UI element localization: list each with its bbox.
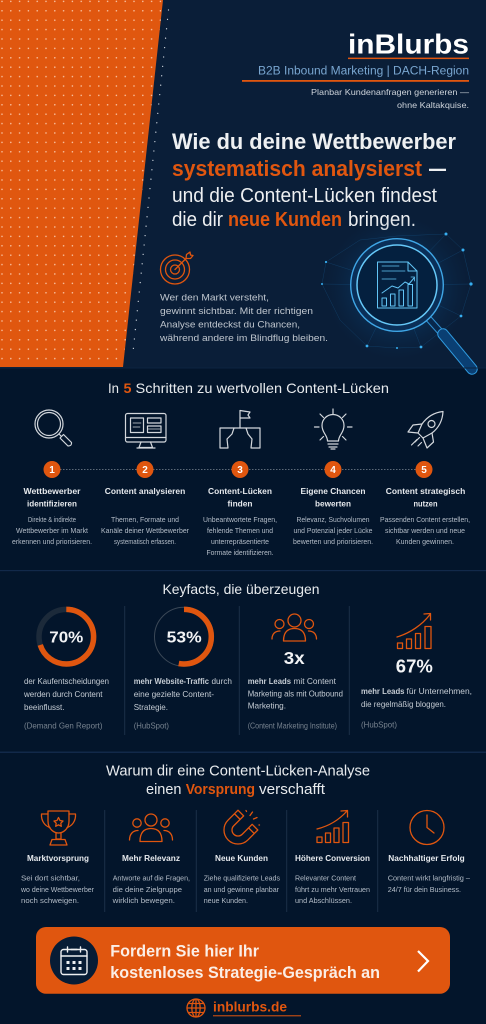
step 3 — [203, 410, 277, 557]
step 5 text — [380, 515, 470, 546]
step 1 heading: Wettbewerber — [24, 486, 81, 496]
panel: hero — [0, 0, 486, 369]
step 1 heading — [24, 486, 81, 508]
step 4 text — [293, 515, 373, 546]
donut chart: 70 percent: 70% — [49, 630, 83, 647]
fact text 70 percent — [23, 676, 109, 712]
subline: Planbar Kundenanfragen generieren — — [311, 87, 470, 97]
step 4 heading — [300, 486, 366, 508]
step 5 — [380, 412, 470, 546]
benefit 1 text: Sei dort sichtbar, — [21, 874, 80, 883]
benefit 5 text — [388, 874, 471, 894]
fact text 70 percent: werden durch Content — [23, 689, 103, 699]
main title: neue Kunden — [228, 209, 342, 231]
fact 53 percent — [134, 607, 232, 731]
subline — [311, 87, 470, 110]
fact 70 percent — [23, 609, 109, 731]
fact text 70 percent: beeinflusst. — [24, 702, 64, 712]
benefit 4 — [295, 810, 370, 905]
step 1 heading: identifizieren — [27, 498, 77, 508]
donut chart: 53 percent: 53% — [167, 630, 202, 647]
fact text 3x: mit Content — [294, 676, 337, 686]
icon: rocket — [408, 412, 443, 448]
icon: flag over gap — [220, 410, 260, 448]
main title: — — [429, 156, 446, 181]
benefit 2 — [112, 814, 190, 905]
icon: target — [160, 252, 193, 284]
heading: five steps: Schritten zu wertvollen Content-Lücken — [136, 380, 389, 396]
step 1 — [12, 410, 92, 546]
icon: light bulb — [314, 409, 352, 449]
heading: benefits: verschafft — [259, 782, 325, 798]
step 2 — [101, 414, 189, 546]
step 2 text: Kanäle deiner Wettbewerber — [101, 526, 189, 535]
fact text 3x: Marketing als mit Outbound — [248, 688, 343, 698]
step 4 heading: bewerten — [315, 498, 351, 508]
stat 67 percent: 67% — [396, 657, 433, 677]
divider hero — [0, 368, 486, 369]
badge 5: 5 — [421, 465, 427, 476]
intro text: gewinnt sichtbar. Mit der richtigen — [160, 306, 313, 316]
step 1 text: erkennen und priorisieren. — [12, 537, 92, 546]
badge 3 — [232, 461, 248, 478]
orange slanted panel — [0, 0, 168, 367]
benefit 1 text: wo deine Wettbewerber — [20, 885, 94, 894]
benefit 5 — [388, 810, 471, 894]
benefit 4 text: und Abschlüssen. — [295, 896, 352, 905]
stat 3x: 3x — [284, 648, 305, 668]
step 3 text: Unbeantwortete Fragen, — [203, 515, 277, 524]
intro text: während andere im Blindflug bleiben. — [159, 333, 328, 343]
benefit 3 text — [204, 874, 280, 905]
intro text: Wer den Markt versteht, — [160, 292, 269, 302]
benefit 3 text: neue Kunden. — [204, 896, 248, 905]
tagline: B2B Inbound Marketing | DACH-Region — [258, 65, 469, 77]
step 5 text: Kunden gewinnen. — [396, 537, 454, 546]
benefit 4 heading: Höhere Conversion — [295, 853, 370, 863]
divider benefits — [0, 752, 486, 753]
step 4 text: Relevanz, Suchvolumen — [296, 515, 370, 524]
divider keyfacts — [0, 570, 486, 571]
benefit 2 text: wirklich bewegen. — [112, 896, 175, 905]
source: (HubSpot) — [361, 720, 397, 730]
intro text — [159, 292, 328, 343]
website address: inblurbs.de — [213, 999, 287, 1015]
icon: trophy — [41, 811, 76, 845]
button text: Fordern Sie hier Ihr — [110, 943, 260, 961]
logo: inBlurbs: inBlurbs — [348, 28, 469, 60]
icon: magnet — [218, 810, 260, 850]
step 4 heading: Eigene Chancen — [300, 486, 366, 496]
benefit 1 text — [20, 874, 94, 905]
icon: growth chart — [317, 810, 348, 842]
step 2 text — [101, 515, 189, 546]
panel: five steps — [12, 380, 470, 557]
fact text 67 percent: mehr Leads — [361, 686, 405, 696]
step 3 heading — [208, 486, 272, 508]
step 3 heading: finden — [228, 498, 252, 508]
fact text 3x: Marketing. — [248, 701, 286, 711]
badge 4: 4 — [330, 465, 336, 476]
illustration: magnifier over document — [321, 216, 473, 369]
step 5 heading — [386, 486, 465, 508]
benefit 2 heading: Mehr Relevanz — [122, 853, 180, 863]
benefit 3 heading: Neue Kunden — [215, 853, 268, 863]
main title: bringen. — [348, 209, 416, 231]
fact 67 percent — [361, 614, 472, 730]
main title: Wie du deine Wettbewerber — [172, 129, 456, 154]
fact text 67 percent — [361, 686, 472, 709]
step 5 heading: nutzen — [414, 498, 438, 508]
step 1 text: Wettbewerber im Markt — [16, 526, 89, 535]
benefit 3 — [204, 810, 280, 905]
benefit 2 text: die deine Zielgruppe — [113, 885, 182, 894]
heading: benefits: Warum dir eine Content-Lücken-Analyse — [106, 764, 370, 780]
icon: clock — [410, 810, 444, 844]
fact text 53 percent: eine gezielte Content- — [134, 689, 214, 699]
benefit 3 text: Ziehe qualifizierte Leads — [204, 874, 280, 883]
step 1 text: Direkte & indirekte — [28, 515, 76, 524]
icon: people — [272, 614, 316, 641]
benefit 4 text — [295, 874, 370, 905]
step 3 text: fehlende Themen und — [207, 526, 273, 535]
step 3 heading: Content-Lücken — [208, 486, 272, 496]
panel: keyfacts — [23, 581, 472, 735]
step 2 heading: Content analysieren — [105, 486, 185, 496]
step 4 — [293, 409, 373, 546]
step 4 text: bewerten und priorisieren. — [293, 537, 373, 546]
fact text 53 percent: durch — [212, 676, 232, 686]
step 3 text: unterrepräsentierte — [211, 537, 269, 546]
fact text 70 percent: der Kaufentscheidungen — [24, 676, 109, 686]
panel: benefits — [20, 764, 471, 912]
heading: keyfacts: Keyfacts, die überzeugen — [162, 581, 320, 597]
icon: magnifier — [35, 410, 72, 446]
fact text 53 percent: Strategie. — [134, 702, 168, 712]
heading: five steps: In — [108, 380, 119, 396]
benefit 5 text: Content wirkt langfristig – — [388, 874, 471, 883]
benefit 4 text: führt zu mehr Vertrauen — [295, 885, 370, 894]
source: (Content Marketing Institute) — [248, 721, 337, 731]
step 2 text: Themen, Formate und — [111, 515, 179, 524]
benefit 5 text: 24/7 für dein Business. — [388, 885, 461, 894]
benefit 4 text: Relevanter Content — [295, 874, 357, 883]
button text: kostenloses Strategie-Gespräch an — [110, 964, 380, 982]
benefit 3 text: an und gewinne planbar — [204, 885, 279, 894]
step 4 text: und Potenzial jeder Lücke — [294, 526, 372, 535]
benefit 1 heading: Marktvorsprung — [27, 853, 89, 863]
badge 1: 1 — [49, 465, 55, 476]
benefit 2 text: Antworte auf die Fragen, — [113, 874, 190, 883]
call to action button — [36, 927, 450, 994]
badge 2: 2 — [142, 465, 148, 476]
main title — [172, 129, 456, 231]
footer link — [187, 999, 301, 1017]
heading: benefits: einen — [146, 782, 182, 798]
icon: calendar — [50, 936, 98, 984]
fact text 67 percent: für Unternehmen, — [406, 686, 472, 696]
icon: growth chart — [397, 614, 431, 648]
subline: ohne Kaltakquise. — [397, 100, 469, 110]
icon: people — [130, 814, 172, 842]
icon: chevron — [418, 951, 428, 972]
icon: globe — [187, 999, 205, 1017]
fact 3x — [248, 614, 343, 731]
step 2 text: systematisch erfassen. — [114, 537, 176, 546]
main title: und die Content-Lücken findest — [172, 185, 437, 207]
heading: benefits — [106, 764, 370, 798]
intro text: Analyse entdeckst du Chancen, — [160, 320, 300, 330]
button text — [110, 943, 380, 982]
timeline — [60, 468, 420, 470]
main title: die dir — [172, 209, 223, 231]
badge 3: 3 — [237, 465, 243, 476]
benefit 2 text — [112, 874, 190, 905]
fact text 53 percent — [134, 676, 232, 712]
fact text 67 percent: die regelmäßig bloggen. — [361, 699, 446, 709]
step 5 text: Passenden Content erstellen, — [380, 515, 470, 524]
source: (HubSpot) — [134, 721, 169, 731]
step 1 text — [12, 515, 92, 546]
heading: benefits: Vorsprung — [186, 782, 255, 798]
benefit 1 — [20, 811, 94, 905]
fact text 3x — [248, 676, 343, 711]
step 3 text — [203, 515, 277, 557]
fact text 3x: mehr Leads — [248, 676, 291, 686]
step 5 text: sichtbar werden und neue — [385, 526, 465, 535]
fact text 53 percent: mehr Website-Traffic — [134, 676, 209, 686]
source: (Demand Gen Report) — [24, 721, 103, 731]
heading: five steps: 5 — [124, 380, 132, 396]
benefit 1 text: noch schweigen. — [21, 896, 79, 905]
icon: monitor with layout — [126, 414, 166, 448]
main title: systematisch analysierst — [172, 156, 423, 181]
benefit 5 heading: Nachhaltiger Erfolg — [388, 853, 465, 863]
step 5 heading: Content strategisch — [386, 486, 465, 496]
step 3 text: Formate identifizieren. — [206, 548, 274, 557]
